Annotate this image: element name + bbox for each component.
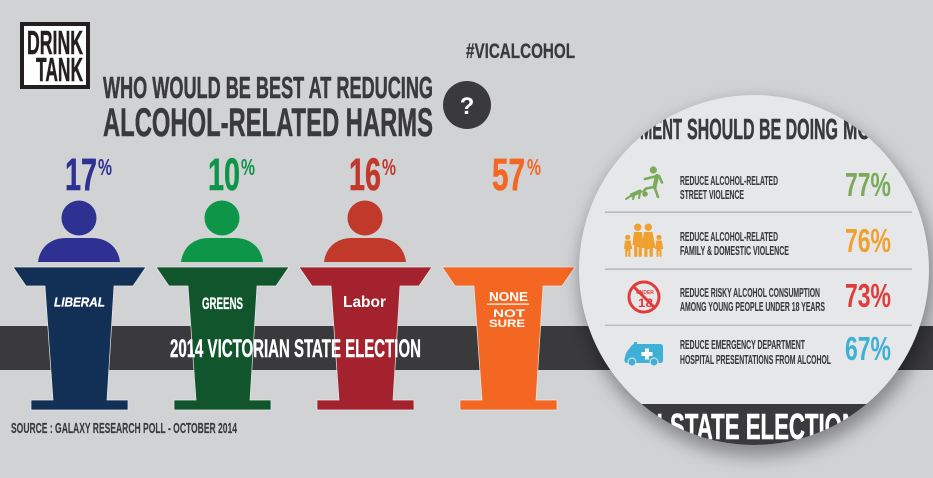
text: emergency department <box>680 338 831 367</box>
magnified heading: MENT <box>640 114 682 146</box>
value: 67%: 67% <box>845 330 891 367</box>
magnified band <box>642 404 866 445</box>
row: street violence <box>626 166 891 203</box>
title <box>103 70 433 145</box>
row: emergency department <box>624 330 891 367</box>
panel: Greens podium <box>156 149 289 410</box>
magnified heading: MORE <box>843 114 895 146</box>
magnified band: N <box>645 406 663 447</box>
icon: no under 18: 18 <box>638 296 653 310</box>
value: 76%: 76% <box>845 222 891 259</box>
title: WHO WOULD BE BEST AT REDUCING <box>103 70 433 105</box>
magnifier shadow <box>580 102 933 456</box>
text: street violence: STREET VIOLENCE <box>680 188 744 202</box>
hashtag: #VICALCOHOL <box>466 40 575 63</box>
None percentage: 57 <box>492 149 525 200</box>
None / Not sure label: NONE <box>489 290 528 304</box>
row: family violence <box>624 222 891 259</box>
None / Not sure label: SURE <box>489 318 525 330</box>
Greens figure <box>181 200 263 262</box>
Greens percentage: 10 <box>208 149 240 200</box>
icon: kicking figure <box>626 166 662 199</box>
Labor label: Labor <box>343 294 386 311</box>
logo: Drink Tank: TANK <box>36 51 83 88</box>
icon: question mark <box>443 81 491 129</box>
band label: 2014 VICTORIAN STATE ELECTION <box>170 335 421 363</box>
Greens lectern <box>156 267 289 410</box>
icon: question mark: ? <box>460 93 474 120</box>
logo: Drink Tank: DRINK <box>27 24 83 61</box>
election band <box>0 326 933 370</box>
panel: magnifier circle <box>560 95 933 454</box>
source note: SOURCE : GALAXY RESEARCH POLL - OCTOBER 2014 <box>11 420 237 437</box>
Labor figure <box>324 200 406 262</box>
Liberal percentage: 17 <box>65 149 97 200</box>
text: emergency department: REDUCE EMERGENCY DEPARTMENT <box>680 338 805 352</box>
text: family violence: FAMILY & DOMESTIC VIOLENCE <box>680 244 789 258</box>
row: under 18 consumption <box>629 277 891 314</box>
value: 73%: 73% <box>845 277 891 314</box>
Liberal figure <box>38 200 120 262</box>
icon: family <box>624 224 663 257</box>
icon: no under 18 <box>629 282 659 312</box>
magnified heading <box>640 118 868 140</box>
panel: None / Not sure podium <box>442 149 575 410</box>
Greens label: GREENS <box>202 295 243 313</box>
Labor percentage: 16 <box>349 149 381 200</box>
None / Not sure label <box>487 290 529 330</box>
panel: Liberal podium <box>13 149 146 410</box>
text: family violence: REDUCE ALCOHOL-RELATED <box>680 230 778 244</box>
None lectern <box>442 267 575 410</box>
panel: Labor podium <box>299 149 432 410</box>
text: family violence <box>680 230 789 258</box>
value: 77%: 77% <box>845 166 891 203</box>
title: ALCOHOL-RELATED HARMS <box>103 101 433 145</box>
Liberal label: LIBERAL <box>54 296 105 310</box>
icon: ambulance <box>624 342 663 366</box>
clipped contents <box>640 118 868 445</box>
text: under 18 consumption: REDUCE RISKY ALCOHOL CONSUMPTION <box>680 286 820 300</box>
text: street violence: REDUCE ALCOHOL-RELATED <box>680 174 778 188</box>
Liberal lectern <box>13 267 146 410</box>
Greens percentage: % <box>241 154 255 180</box>
icon: no under 18: UNDER <box>636 290 654 296</box>
None percentage: % <box>527 154 541 180</box>
None / Not sure label: NOT <box>493 308 525 320</box>
Labor lectern <box>299 267 432 410</box>
text: street violence <box>680 174 778 202</box>
logo: Drink Tank <box>22 24 88 88</box>
Labor percentage: % <box>382 154 396 180</box>
Liberal percentage: % <box>98 154 112 180</box>
text: under 18 consumption <box>680 286 825 314</box>
